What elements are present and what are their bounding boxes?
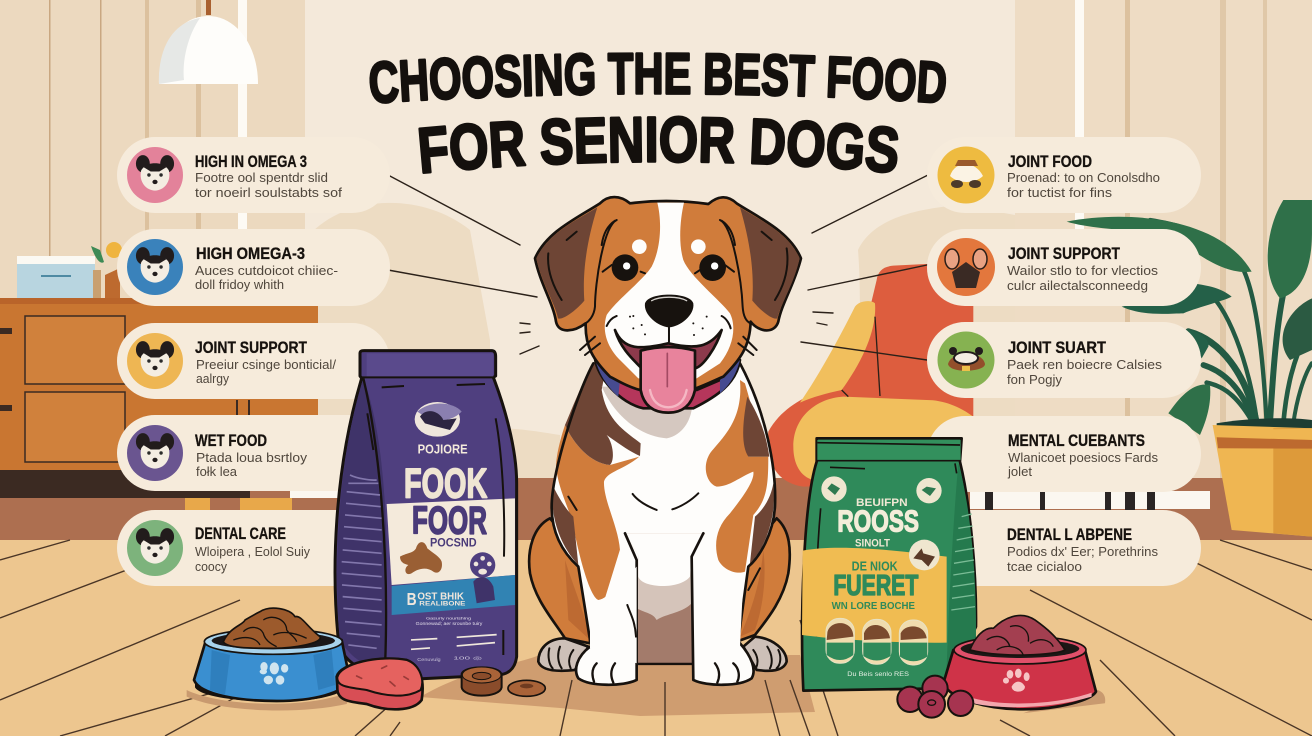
- left panel: wet food: WET FOOD: [195, 432, 267, 450]
- icon: dog face on green: [938, 332, 994, 388]
- icon: dog on yellow: [127, 333, 183, 389]
- title: CHOOSING THE BEST FOOD: [369, 52, 946, 104]
- purple food bag: Cenuvulg: [417, 657, 441, 662]
- left panel: wet food: fołk lea: [196, 465, 237, 479]
- left panel: dental care: coocy: [195, 560, 228, 574]
- icon: dog on purple: [127, 425, 183, 481]
- right panel: joint support: Wailor stlo to for vlectios: [1007, 264, 1158, 278]
- dog body: [529, 363, 790, 685]
- right panel: mental cuebants: Wlanicoet poesiocs Fards: [1008, 451, 1158, 465]
- left panel: high omega-3: [117, 229, 390, 306]
- purple food bag: Gasurly nourishing: [426, 616, 471, 620]
- left panel: joint support: JOINT SUPPORT: [195, 339, 307, 357]
- left panel: high omega-3: Auces cutdoicot chiiec-: [195, 264, 338, 278]
- icon: dog on blue: [127, 239, 183, 295]
- right panel: dental l abpene: [927, 510, 1201, 586]
- right panel: joint suart: Paek ren boiecre Calsies: [1007, 358, 1162, 372]
- title: [369, 52, 946, 174]
- purple food bag: FOOR: [412, 499, 487, 542]
- left panel: high in omega 3: HIGH IN OMEGA 3: [195, 153, 307, 171]
- left panel: joint support: Preeiur csinge bonticial/: [196, 358, 337, 372]
- purple food bag: 100 ◎: [453, 655, 482, 660]
- left panel: joint support: aalrgy: [196, 372, 230, 386]
- left panel: wet food: Ptada loua bsrtloy: [196, 451, 308, 465]
- armchair: [768, 262, 973, 487]
- left panel: high in omega 3: Footre ool spentdr slid: [195, 171, 328, 185]
- maroon treats: [897, 676, 973, 718]
- chair legs: [985, 492, 1155, 510]
- brown kibble: [223, 608, 320, 648]
- potted plant: [1067, 200, 1312, 537]
- icon: dog face on orange: [937, 238, 995, 296]
- purple food bag: B: [407, 589, 417, 609]
- wall lamp: [159, 0, 258, 84]
- left panel: joint support: [117, 323, 390, 399]
- green food bag: Du Beis senlo RES: [847, 671, 909, 678]
- left panel: high omega-3: HIGH OMEGA-3: [196, 245, 305, 263]
- green food bag: DE NIOK: [852, 560, 898, 574]
- right panel: joint suart: fon Pogjy: [1007, 373, 1063, 387]
- product thumbnails: [826, 618, 928, 665]
- left panel: high omega-3: doll fridoy whith: [195, 278, 284, 292]
- right panel: joint food: [927, 137, 1201, 213]
- collar: [595, 358, 740, 408]
- red meat treat: [337, 659, 423, 709]
- right panel: joint food: Proenad: to on Conolsdho: [1007, 171, 1160, 185]
- tongue: [641, 347, 695, 413]
- bag emblem: [415, 402, 462, 437]
- green food bag: ROOSS: [837, 505, 919, 539]
- dog head: [535, 197, 801, 413]
- title: FOR SENIOR DOGS: [418, 116, 898, 174]
- nose: [645, 295, 693, 327]
- left panel: high in omega 3: [117, 137, 390, 213]
- paw badge: [470, 552, 495, 603]
- paw print: [1003, 669, 1030, 692]
- bag badges: [821, 476, 942, 570]
- left panel: dental care: Wloipera , Eolol Suiy: [195, 545, 311, 559]
- floor boards: [0, 540, 1312, 736]
- green food bag: FUERET: [833, 570, 919, 602]
- purple food bag: FOOK: [404, 460, 487, 506]
- right panel: joint food: JOINT FOOD: [1008, 153, 1092, 171]
- right panel: joint food: for tuctist for fins: [1007, 186, 1112, 200]
- meat chunks: [970, 615, 1065, 655]
- right panel: joint support: culcr ailectalsconneedg: [1007, 279, 1148, 293]
- green food bag: SINOLT: [855, 538, 890, 550]
- right panel: mental cuebants: MENTAL CUEBANTS: [1008, 432, 1145, 450]
- left panel: dental care: DENTAL CARE: [195, 525, 286, 543]
- green food bag: BEUIFPN: [856, 497, 908, 509]
- left panel: dental care: [117, 510, 390, 586]
- right panel: joint suart: JOINT SUART: [1008, 339, 1106, 357]
- brown round treats: [462, 667, 545, 696]
- right panel: joint support: JOINT SUPPORT: [1008, 245, 1120, 263]
- cabinet with box and flowers: [0, 242, 318, 470]
- icon: dog on pink: [127, 147, 183, 203]
- purple food bag: POJIORE: [418, 442, 468, 456]
- left panel: high in omega 3: tor noeirl soulstabts sof: [195, 186, 343, 200]
- icon: dog on green: [127, 520, 183, 576]
- right panel: mental cuebants: [927, 416, 1201, 492]
- purple food bag: OST BHIK: [417, 591, 465, 602]
- purple food bag: POCSND: [430, 536, 477, 550]
- kibble: [400, 542, 442, 574]
- right panel: dental l abpene: DENTAL L ABPENE: [1007, 526, 1132, 544]
- right panel: joint support: [927, 229, 1201, 306]
- blue bowl with brown food: [187, 608, 353, 710]
- green food bag: WN LORE BOCHE: [832, 601, 915, 612]
- right panel: joint suart: [927, 322, 1201, 398]
- connector lines: [388, 175, 928, 360]
- paw print: [260, 662, 288, 685]
- dog illustration: [529, 197, 801, 685]
- purple food bag: REALIBONE: [419, 601, 466, 608]
- right panel: dental l abpene: Podios dx' Eer; Porethrins: [1007, 545, 1158, 559]
- purple food bag: Gonnewad; aer srounbe tuiry: [416, 621, 483, 626]
- icon: dog face on yellow: [938, 146, 994, 204]
- purple food bag: [335, 351, 517, 680]
- red bowl with meat food: [943, 615, 1105, 713]
- right panel: mental cuebants: jolet: [1007, 465, 1033, 479]
- left panel: wet food: [117, 415, 390, 491]
- right panel: dental l abpene: tcae cicialoo: [1007, 560, 1082, 574]
- green food bag: [802, 438, 976, 691]
